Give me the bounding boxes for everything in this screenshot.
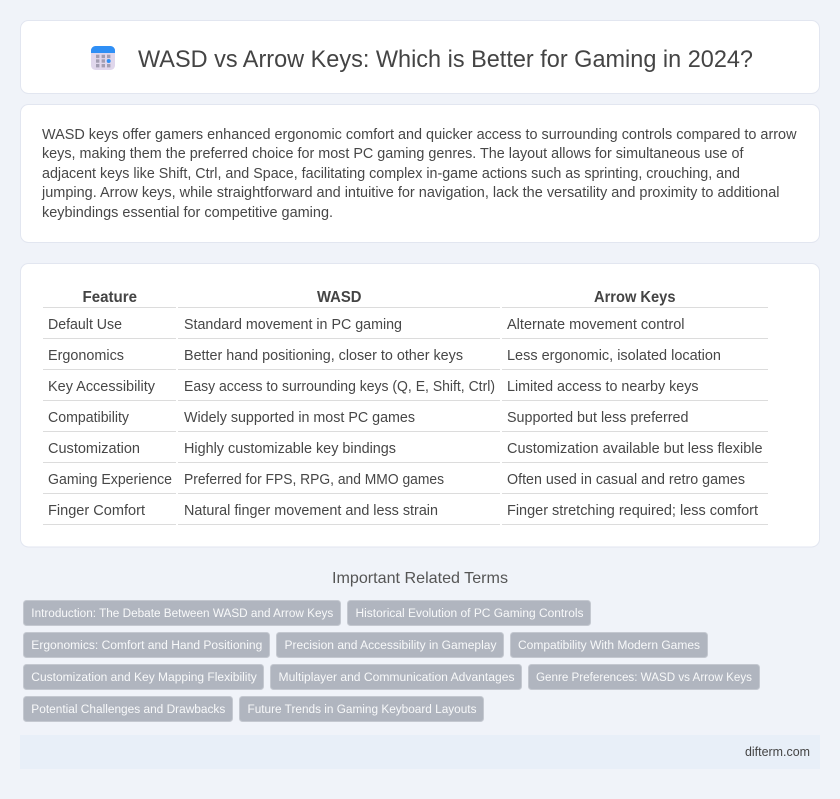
table row: Ergonomics: Ergonomics [48, 348, 124, 364]
tag: Ergonomics: Comfort and Hand Positioning [31, 638, 262, 652]
tag [24, 696, 232, 722]
tag: Customization and Key Mapping Flexibility [31, 670, 258, 684]
footer [20, 735, 820, 769]
table header row: WASD [317, 289, 362, 306]
table row: Finger Comfort: Finger stretching required; less comfort [507, 503, 758, 519]
table row: Customization [43, 441, 768, 463]
tag: Potential Challenges and Drawbacks [31, 702, 225, 716]
table row: Finger Comfort [43, 503, 768, 525]
text block: introduction paragraph: keys, making them the preferred choice for most PC gaming genres. The layout allows for simultaneous use of [42, 146, 744, 162]
text block: introduction paragraph: adjacent keys like Shift, Ctrl, and Space, facilitating complex in-game actions such as sprinting, crouching, and [42, 166, 740, 182]
tag [276, 632, 504, 658]
title: WASD vs Arrow Keys: Which is Better for Gaming in 2024? [138, 46, 753, 73]
tag: Compatibility With Modern Games [518, 638, 700, 652]
table header row: Arrow Keys [594, 289, 676, 306]
tag [24, 600, 340, 626]
table row: Default Use: Default Use [48, 317, 122, 333]
tag [528, 664, 760, 690]
table row: Default Use [43, 317, 768, 339]
table row: Default Use: Alternate movement control [507, 317, 684, 333]
icon: calendar [91, 46, 115, 70]
table row: Compatibility [43, 410, 768, 432]
table row: Customization: Customization [48, 441, 140, 457]
table row: Compatibility: Supported but less preferred [507, 410, 688, 426]
table row: Ergonomics [43, 348, 768, 370]
tag: Introduction: The Debate Between WASD and Arrow Keys [31, 606, 333, 620]
table row: Gaming Experience: Preferred for FPS, RPG, and MMO games [184, 472, 444, 488]
tag [270, 664, 522, 690]
tag [24, 664, 264, 690]
tag [24, 632, 270, 658]
table row: Compatibility: Widely supported in most PC games [184, 410, 415, 426]
table row: Ergonomics: Better hand positioning, closer to other keys [184, 348, 463, 364]
text block: introduction paragraph [41, 127, 797, 221]
table row: Compatibility: Compatibility [48, 410, 130, 426]
tag: Future Trends in Gaming Keyboard Layouts [248, 702, 476, 716]
table row: Customization: Highly customizable key bindings [184, 441, 396, 457]
tag [510, 632, 708, 658]
panel: title header [20, 20, 820, 94]
tag [348, 600, 590, 626]
table row: Ergonomics: Less ergonomic, isolated location [507, 348, 721, 364]
table row: Customization: Customization available but less flexible [507, 441, 762, 457]
table header row [43, 289, 768, 308]
tag: Historical Evolution of PC Gaming Controls [356, 606, 584, 620]
table row: Finger Comfort: Natural finger movement and less strain [184, 503, 438, 519]
table row: Finger Comfort: Finger Comfort [48, 503, 145, 519]
table row: Key Accessibility: Limited access to nearby keys [507, 379, 698, 395]
text block: introduction paragraph: keybindings essential for competitive gaming. [42, 205, 333, 221]
table row: Gaming Experience: Gaming Experience [48, 472, 172, 488]
panel: related term tags [24, 600, 760, 722]
tag: Multiplayer and Communication Advantages [278, 670, 514, 684]
table row: Default Use: Standard movement in PC gaming [184, 317, 402, 333]
table row: Key Accessibility [43, 379, 768, 401]
text block: introduction paragraph: WASD keys offer gamers enhanced ergonomic comfort and quicker access to surrounding controls compared to arrow [42, 127, 797, 143]
panel: comparison table [20, 264, 820, 547]
panel: introduction [20, 104, 820, 242]
table row: Key Accessibility: Key Accessibility [48, 379, 156, 395]
footer credit: difterm.com [745, 744, 810, 759]
tag [240, 696, 484, 722]
heading: Important Related Terms: Important Related Terms [332, 570, 508, 587]
table row: Key Accessibility: Easy access to surrounding keys (Q, E, Shift, Ctrl) [184, 379, 495, 395]
table header row: Feature [82, 289, 137, 306]
tag: Precision and Accessibility in Gameplay [284, 638, 497, 652]
text block: introduction paragraph: jumping. Arrow keys, while straightforward and intuitive for navigation, lack the versatility and proximity to additional [41, 185, 780, 201]
table row: Gaming Experience: Often used in casual and retro games [507, 472, 745, 488]
table row: Gaming Experience [43, 472, 768, 494]
tag: Genre Preferences: WASD vs Arrow Keys [536, 670, 752, 684]
